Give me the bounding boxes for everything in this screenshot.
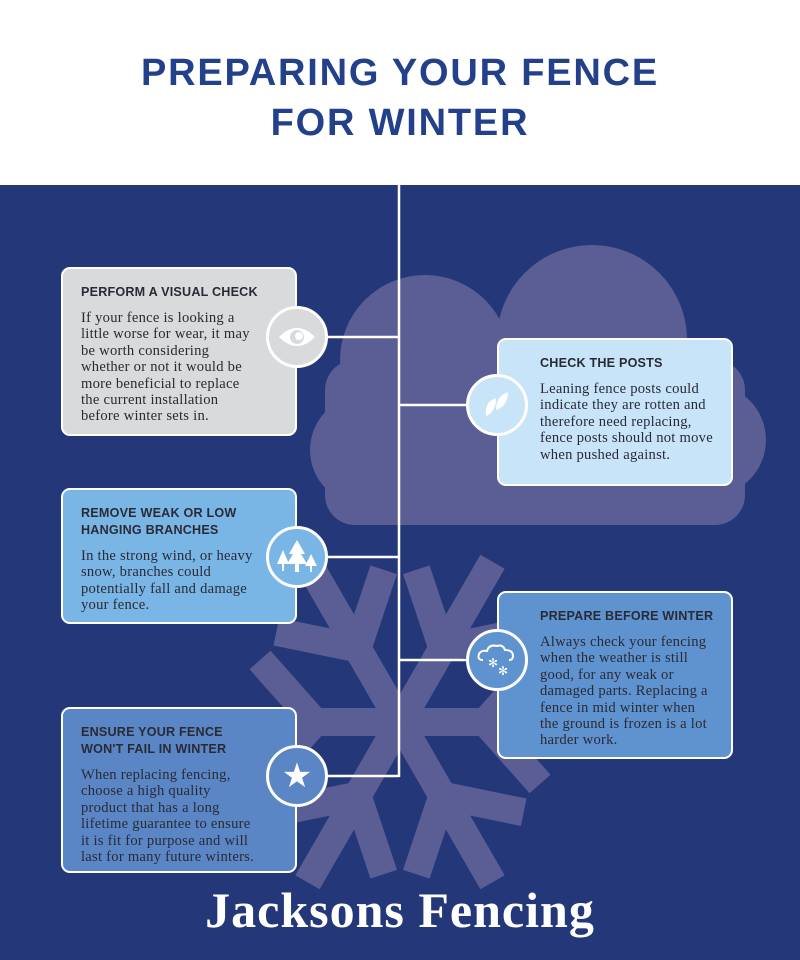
panel: prepare before winter xyxy=(497,591,733,759)
panel: prepare before winter: harder work. xyxy=(540,732,618,748)
footer logo: Jacksons Fencing xyxy=(205,882,595,938)
icon: weather xyxy=(466,629,528,691)
panel: prepare before winter: PREPARE BEFORE WINTER xyxy=(540,609,713,623)
panel: ensure fence: it is fit for purpose and will xyxy=(81,833,248,849)
panel: ensure fence: WON'T FAIL IN WINTER xyxy=(81,742,226,756)
title: FOR WINTER xyxy=(271,102,529,144)
title: PREPARING YOUR FENCE xyxy=(141,52,659,94)
panel: visual check: PERFORM A VISUAL CHECK xyxy=(81,285,258,299)
panel: ensure fence: product that has a long xyxy=(81,800,220,816)
panel: prepare before winter: Always check your fencing xyxy=(540,634,706,650)
icon: weather: ✻ xyxy=(488,656,498,670)
icon: weather: ✻ xyxy=(498,664,508,678)
panel: ensure fence: When replacing fencing, xyxy=(81,767,231,783)
panel: prepare before winter: good, for any weak or xyxy=(540,667,674,683)
panel: branches: snow, branches could xyxy=(81,564,211,580)
icon: eye xyxy=(266,306,328,368)
panel: branches: potentially fall and damage xyxy=(81,581,247,597)
panel: prepare before winter: when the weather is still xyxy=(540,650,688,666)
panel: visual check: be worth considering xyxy=(81,343,209,359)
panel: ensure fence: choose a high quality xyxy=(81,783,211,799)
title xyxy=(141,52,659,144)
panel: check the posts xyxy=(497,338,733,486)
panel: check the posts: indicate they are rotten and xyxy=(540,397,706,413)
panel: visual check: whether or not it would be xyxy=(81,359,242,375)
panel: check the posts: fence posts should not move xyxy=(540,430,713,446)
icon: star: ★ xyxy=(282,757,312,795)
panel: ensure fence: lifetime guarantee to ensure xyxy=(81,816,250,832)
panel: prepare before winter: the ground is frozen is a lot xyxy=(540,716,707,732)
icon: trees xyxy=(266,526,328,588)
panel: branches: In the strong wind, or heavy xyxy=(81,548,253,564)
panel: check the posts: Leaning fence posts could xyxy=(540,381,699,397)
panel: visual check: more beneficial to replace xyxy=(81,376,239,392)
panel: visual check xyxy=(61,267,297,436)
icon: leaves xyxy=(466,374,528,436)
panel: ensure fence: ENSURE YOUR FENCE xyxy=(81,725,223,739)
panel: prepare before winter: damaged parts. Replacing a xyxy=(540,683,708,699)
panel: branches xyxy=(61,488,297,624)
icon: star xyxy=(266,745,328,807)
panel: visual check: If your fence is looking a xyxy=(81,310,235,326)
panel: prepare before winter: fence in mid winter when xyxy=(540,700,695,716)
panel: visual check: little worse for wear, it may xyxy=(81,326,250,342)
panel: check the posts: therefore need replacing, xyxy=(540,414,692,430)
panel: ensure fence xyxy=(61,707,297,873)
panel: visual check: before winter sets in. xyxy=(81,408,209,424)
panel: ensure fence: last for many future winters. xyxy=(81,849,254,865)
panel: branches: your fence. xyxy=(81,597,149,613)
panel: branches: HANGING BRANCHES xyxy=(81,523,219,537)
panel: check the posts: when pushed against. xyxy=(540,447,670,463)
panel: branches: REMOVE WEAK OR LOW xyxy=(81,506,236,520)
panel: visual check: the current installation xyxy=(81,392,218,408)
panel: check the posts: CHECK THE POSTS xyxy=(540,356,663,370)
